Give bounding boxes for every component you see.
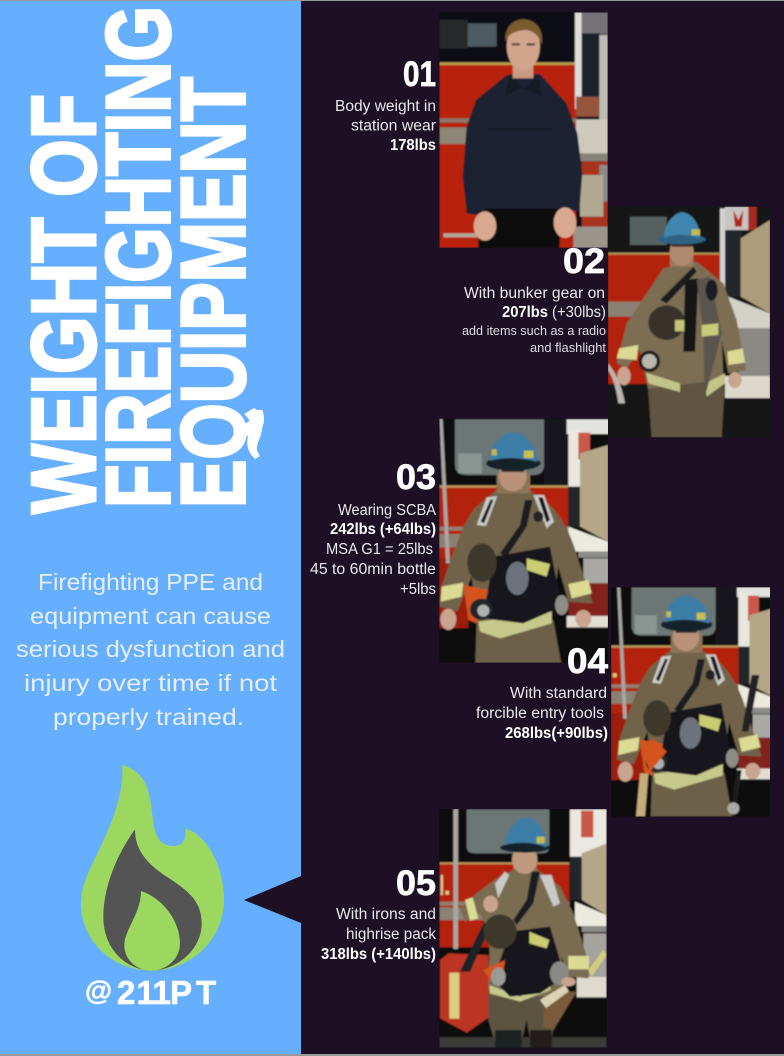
step 02 text: and flashlight [530,340,606,355]
step 05 text [321,864,436,963]
title [14,6,264,514]
step 01 text: 01 [403,55,436,94]
logo handle: 211PT [117,974,216,1011]
intro paragraph: serious dysfunction and [16,636,285,662]
step 02 text: 207lbs [502,304,548,321]
title: WEIGHT OF [14,94,115,514]
intro paragraph: equipment can cause [30,603,271,629]
photo 04: forcible entry tools [611,587,770,817]
step 03 text [310,458,437,598]
step 05 text: highrise pack [346,926,436,943]
step 05 text: 318lbs (+140lbs) [321,946,436,963]
step 04 text: 268lbs(+90lbs) [505,725,608,742]
step 01 text: Body weight in [335,98,436,115]
step 04 text: forcible entry tools [476,705,604,722]
step 05 text: 05 [396,864,436,903]
step 02 text: With bunker gear on [464,285,605,302]
step 05 text: With irons and [336,906,436,923]
photo 03: wearing SCBA [433,417,613,670]
step 01 text [335,55,436,154]
step 04 text: 04 [567,642,609,681]
step 04 text [476,642,609,742]
step 03 text: Wearing SCBA [338,502,437,519]
step 01 text: station wear [351,118,436,134]
pointer arrow [244,876,301,923]
logo handle: @ [85,976,112,1006]
intro paragraph [16,569,285,730]
intro paragraph: Firefighting PPE and [38,569,263,595]
step 03 text: 03 [396,458,436,497]
photo 01: station wear [439,12,608,248]
step 03 text: +5lbs [400,581,436,598]
step 02 text: add items such as a radio [462,323,606,338]
step 03 text: MSA G1 = 25lbs [326,541,433,558]
icon: flame logo [81,765,224,971]
step 01 text: 178lbs [390,137,436,154]
step 02 text: (+30lbs) [552,304,606,321]
step 03 text: 45 to 60min bottle [310,561,436,578]
step 02 text: 02 [563,242,605,281]
intro paragraph: injury over time if not [24,670,278,696]
step 04 text: With standard [510,685,607,702]
step 02 text [462,242,606,355]
step 03 text: 242lbs (+64lbs) [330,521,436,538]
photo 02: bunker gear [603,203,773,440]
photo 05: irons and highrise pack [433,807,613,1053]
blue side panel [0,0,301,1056]
intro paragraph: properly trained. [53,704,244,730]
